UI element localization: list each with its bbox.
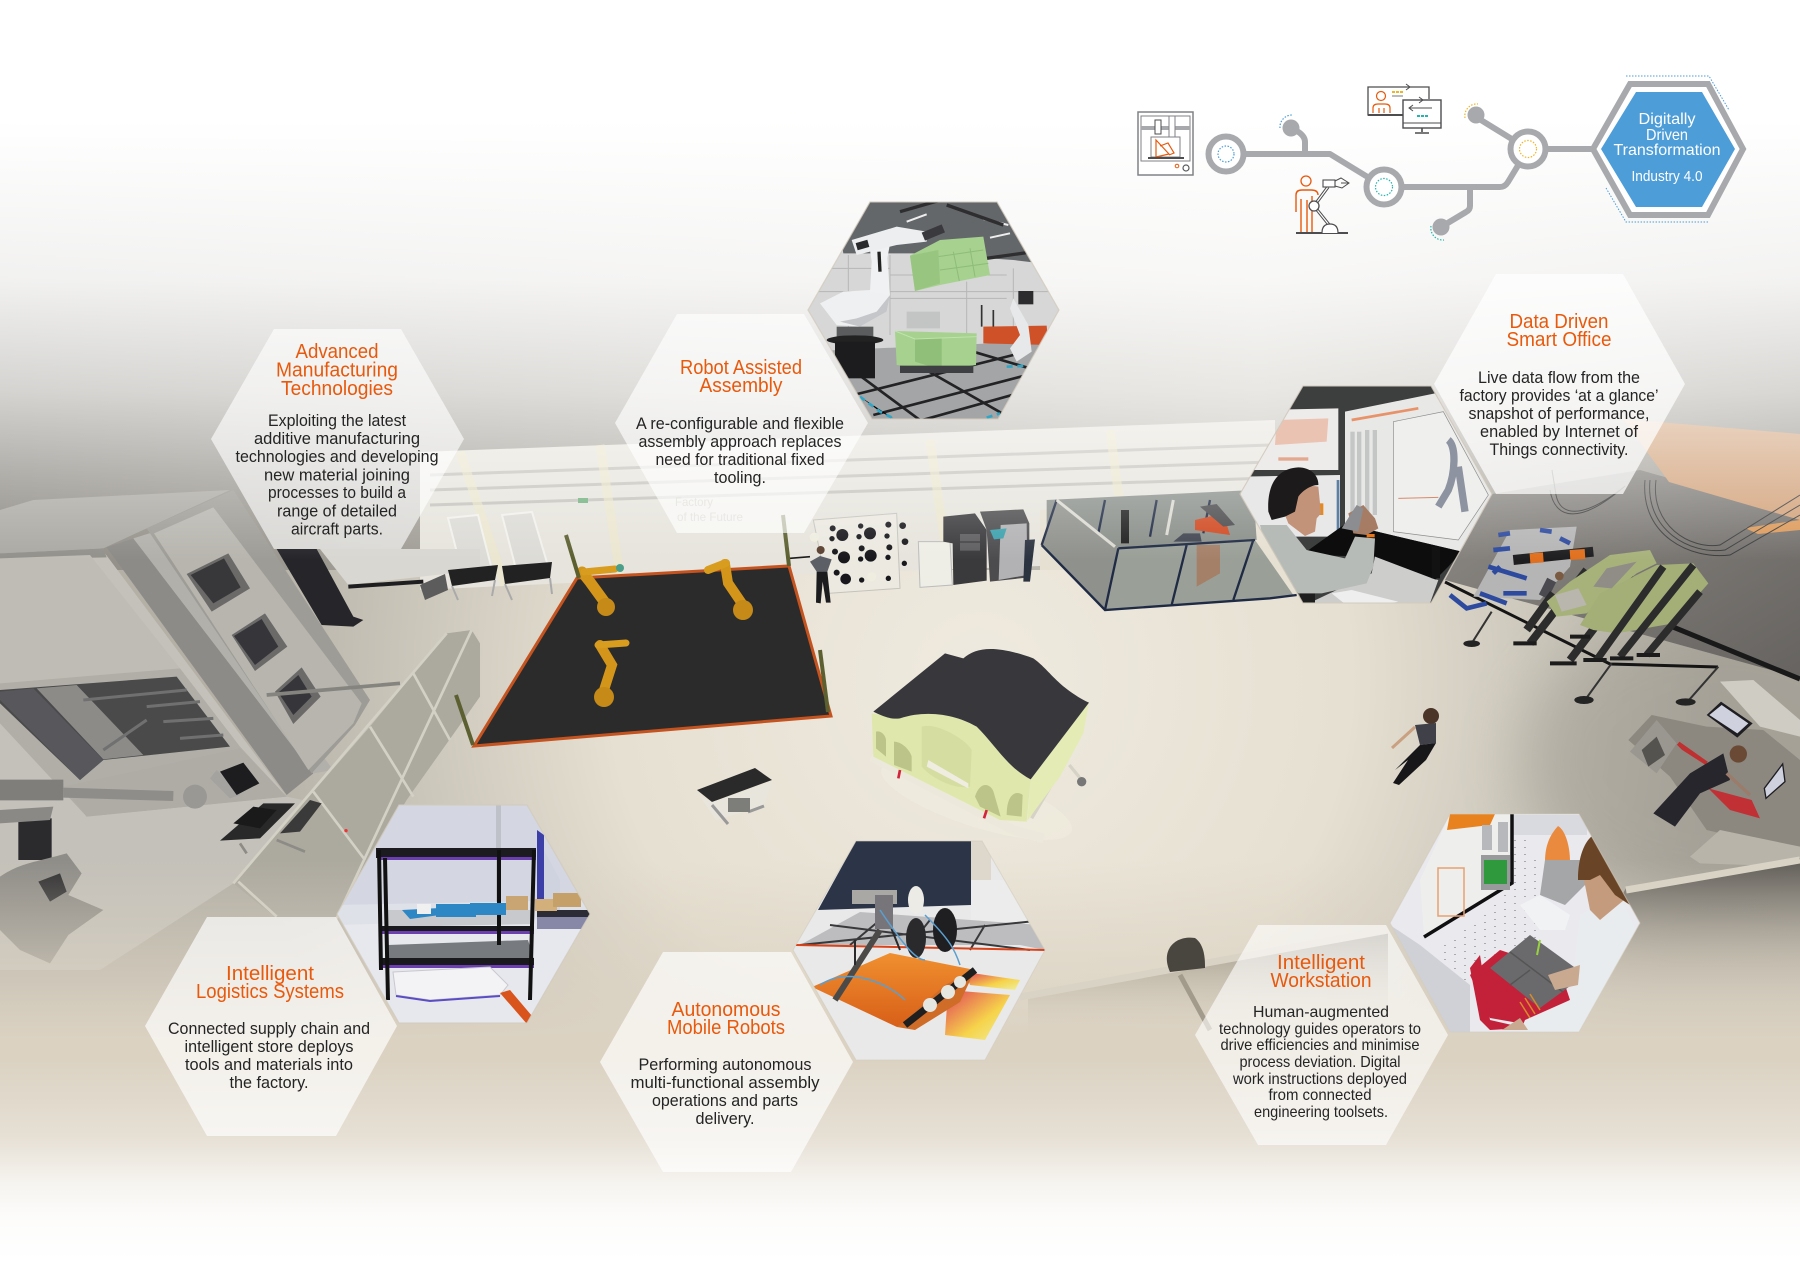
heading: Logistics Systems: [196, 981, 344, 1003]
heading: [276, 341, 398, 400]
safety posts: [456, 515, 828, 745]
woman: [1524, 971, 1585, 1025]
heading: Technologies: [281, 378, 393, 400]
heading: Robot Assisted: [680, 357, 802, 379]
heading: [667, 999, 785, 1039]
panel: Intelligent Logistics Systems: [145, 917, 397, 1136]
heading: Advanced: [296, 341, 378, 363]
lower mezzanine: [1020, 858, 1800, 1040]
heading: Workstation: [1270, 970, 1372, 992]
image hexagon: logistics: [330, 800, 595, 1030]
body text: snapshot of performance,: [1468, 404, 1650, 423]
right wall: [1445, 419, 1800, 679]
left white robot: [820, 227, 943, 378]
branch dots: [1280, 104, 1484, 240]
body text: Exploiting the latest: [268, 411, 406, 430]
heading: [1270, 952, 1372, 992]
lower tan floor: [0, 860, 1800, 1273]
body text: range of detailed: [277, 502, 397, 520]
image hexagon border: [1390, 814, 1640, 1032]
node 1: [1208, 136, 1244, 172]
heading: Intelligent: [1277, 952, 1365, 974]
top fade: [0, 0, 1800, 560]
heading: Intelligent: [226, 963, 314, 985]
image hexagon: mobile robot: [790, 838, 1050, 1063]
body text: engineering toolsets.: [1254, 1104, 1388, 1121]
image hexagon: smart office: [1240, 386, 1492, 603]
body text: technologies and developing: [236, 447, 438, 466]
faint sign: of the Future: [677, 510, 743, 524]
hexagon: Digitally Driven Transformation: Driven: [1646, 127, 1688, 144]
walking person: [1392, 708, 1439, 785]
pegboard dots: [1445, 840, 1535, 985]
heading: [1506, 311, 1612, 351]
body text: [630, 1055, 820, 1128]
body text: the factory.: [230, 1073, 308, 1092]
hexagon: Digitally Driven Transformation: [1593, 76, 1743, 222]
black machines: [918, 509, 1035, 587]
node 3: [1510, 132, 1546, 166]
shelf unit: [376, 848, 581, 1024]
yellow robot 1: [582, 564, 624, 616]
image hexagon border: [793, 841, 1045, 1060]
panel: Data Driven Smart Office: [1434, 274, 1685, 494]
heading: Smart Office: [1506, 329, 1612, 351]
body text: [1219, 1004, 1421, 1121]
yellow robot 3: [594, 643, 626, 707]
panel: Autonomous Mobile Robots: [600, 952, 853, 1172]
body text: technology guides operators to: [1219, 1021, 1421, 1038]
carts: [420, 562, 552, 600]
body text: need for traditional fixed: [656, 450, 824, 469]
green jig: [1463, 550, 1718, 706]
panel: Advanced Manufacturing Technologies: [211, 329, 464, 549]
body text: Things connectivity.: [1490, 440, 1628, 459]
heading: Autonomous: [672, 999, 780, 1021]
body text: Live data flow from the: [1478, 368, 1640, 387]
image hexagon border: [337, 805, 590, 1023]
icon: human and robot arm: [1296, 176, 1349, 233]
heading: [196, 963, 344, 1003]
body text: processes to build a: [268, 483, 406, 502]
body text: additive manufacturing: [254, 429, 420, 448]
body text: multi-functional assembly: [630, 1073, 820, 1092]
stanchions: [1472, 612, 1718, 703]
yellow robot 2: [708, 563, 753, 620]
green lower part: [895, 331, 977, 370]
image hexagon: workstation: [1385, 810, 1645, 1035]
robot arm: [0, 763, 259, 963]
heading: Assembly: [700, 375, 782, 397]
body text: factory provides ‘at a glance’: [1460, 386, 1658, 405]
icon: connected monitors: [1368, 84, 1441, 133]
person at board: [810, 546, 832, 603]
faint sign: Factory: [675, 495, 713, 509]
body text: enabled by Internet of: [1480, 422, 1638, 441]
black table: [220, 800, 322, 853]
heading: [680, 357, 802, 397]
body text: new material joining: [264, 466, 410, 484]
icon: 3D printer: [1138, 112, 1193, 175]
green upper part: [910, 237, 990, 291]
back wall: [420, 420, 1275, 590]
heading: Manufacturing: [276, 360, 398, 382]
body text: Performing autonomous: [638, 1055, 812, 1074]
image hexagon border: [1240, 386, 1492, 603]
body text: Connected supply chain and: [168, 1019, 370, 1038]
node 2: [1366, 170, 1402, 204]
cables: [1550, 470, 1800, 556]
platform with robots: [420, 515, 831, 746]
body text: [236, 411, 438, 538]
panel: Robot Assisted Assembly: [615, 314, 868, 533]
body text: [636, 414, 844, 487]
faint sign: [675, 495, 743, 524]
image hexagon border: [808, 202, 1059, 419]
left building: [0, 490, 480, 970]
body text: Human-augmented: [1253, 1004, 1389, 1021]
body text: from connected: [1268, 1087, 1372, 1104]
fixture board: [790, 513, 908, 593]
panel: Intelligent Workstation: [1195, 925, 1448, 1145]
body text: tools and materials into: [185, 1055, 353, 1074]
roadmap diagram: [1138, 76, 1743, 240]
hexagon: Digitally Driven Transformation: Transformation: [1614, 142, 1720, 159]
body text: [168, 1019, 370, 1092]
body text: [1460, 368, 1658, 459]
small cart: [697, 768, 772, 824]
body text: delivery.: [696, 1109, 754, 1128]
arm: [1545, 826, 1570, 862]
body text: intelligent store deploys: [184, 1037, 354, 1056]
image hexagon: robot assisted assembly: [808, 202, 1058, 419]
body text: tooling.: [714, 468, 766, 487]
body text: work instructions deployed: [1232, 1071, 1407, 1088]
blue rack: [1450, 527, 1593, 608]
heading: Mobile Robots: [667, 1017, 785, 1039]
body text: aircraft parts.: [291, 520, 383, 538]
hexagon: Digitally Driven Transformation: Industry 4.0: [1632, 169, 1702, 185]
man: [1260, 467, 1378, 593]
right white robot: [1010, 298, 1032, 362]
connector lines: [1226, 117, 1600, 227]
body text: A re-configurable and flexible: [636, 414, 844, 433]
body text: process deviation. Digital: [1240, 1054, 1400, 1071]
heading: Data Driven: [1510, 311, 1608, 333]
workstation: [1628, 680, 1800, 867]
large tool: [872, 649, 1089, 856]
body text: assembly approach replaces: [638, 432, 842, 451]
right floor shade: [1520, 610, 1800, 910]
glass enclosure: [1042, 490, 1297, 610]
body text: operations and parts: [652, 1091, 798, 1110]
jig: [1470, 955, 1510, 1030]
bottom fade: [0, 1060, 1800, 1273]
hexagon: Digitally Driven Transformation: Digitally: [1638, 111, 1696, 128]
body text: drive efficiencies and minimise: [1220, 1037, 1420, 1054]
